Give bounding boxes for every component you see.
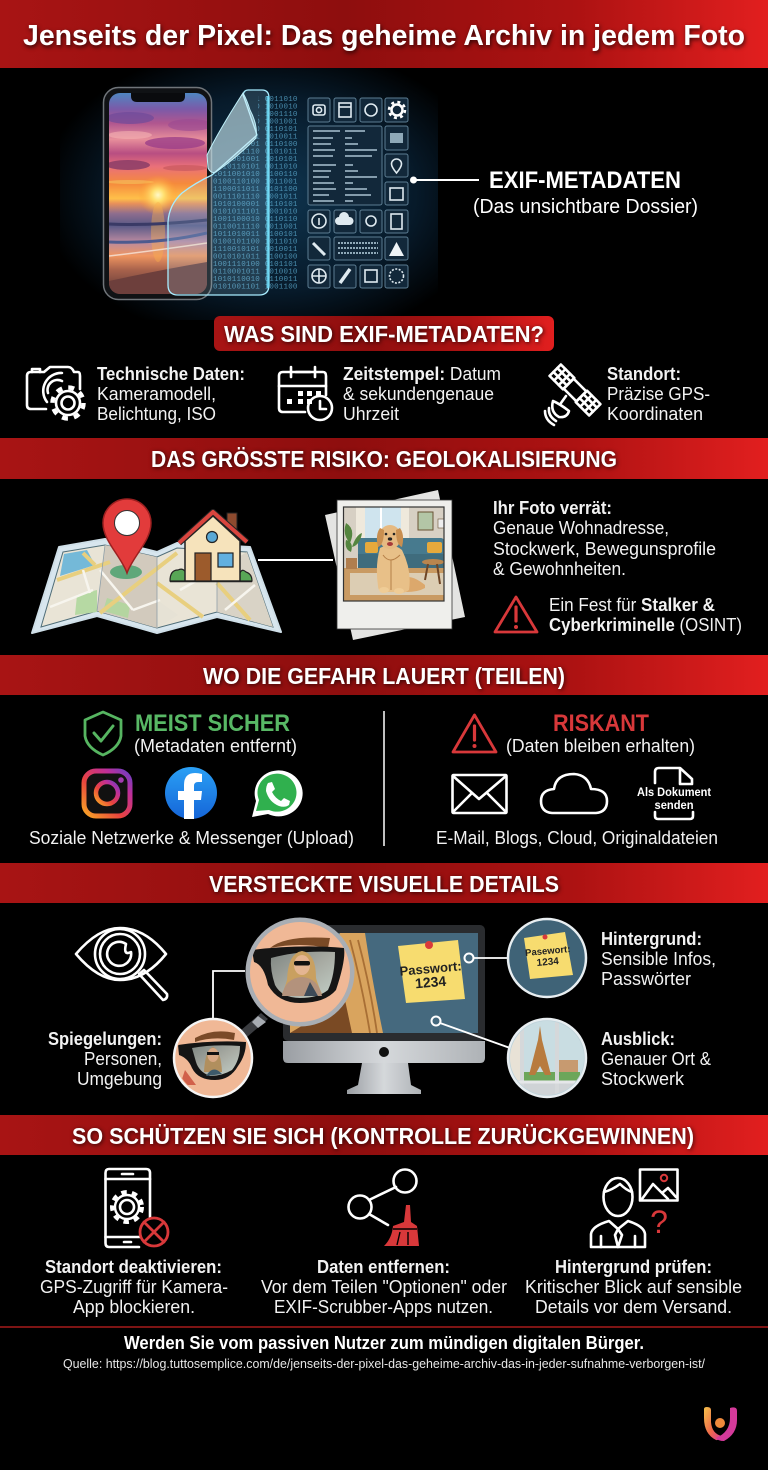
tip: Daten entfernen: Daten entfernen: <box>317 1256 450 1277</box>
text: Hintergrund: Sensible Infos, <box>601 948 716 969</box>
panel: riskant: (Daten bleiben erhalten) <box>506 735 695 756</box>
text: Ihr Foto verrät <box>493 497 716 579</box>
tip: Standort deaktivieren <box>40 1169 228 1317</box>
text: Spiegelungen: Umgebung <box>77 1068 162 1089</box>
phone <box>104 88 212 300</box>
text: Ihr Foto verrät: & Gewohnheiten. <box>493 558 626 579</box>
tip: Standort deaktivieren: GPS-Zugriff für Kamera- <box>40 1276 228 1297</box>
icon: WhatsApp <box>252 770 303 817</box>
panel: meist sicher: MEIST SICHER <box>135 710 290 737</box>
section bar: Wo die Gefahr lauert: WO DIE GEFAHR LAUERT (TEILEN) <box>203 663 565 689</box>
icon: cloud <box>541 774 607 813</box>
panel: riskant: E-Mail, Blogs, Cloud, Originaldateien <box>436 827 718 848</box>
callout: Stalker warning: Cyberkriminelle (OSINT) <box>549 614 742 635</box>
text: Spiegelungen <box>48 1028 162 1089</box>
panel: meist sicher: (Metadaten entfernt) <box>134 735 297 756</box>
circle: Hintergrund detail <box>508 919 586 997</box>
binary data columns: 0110001011 1010010 <box>213 268 298 276</box>
text: Hintergrund: Hintergrund: <box>601 928 702 949</box>
binary data columns: 0101100101 1010011 <box>213 134 298 142</box>
sticky note <box>398 940 465 1003</box>
header banner <box>0 0 768 68</box>
circle: Hintergrund detail: 1234 <box>536 956 560 969</box>
binary data columns: 1001101011 0011010 <box>213 96 298 104</box>
text: Ihr Foto verrät: Ihr Foto verrät: <box>493 497 612 518</box>
icon: person with image and question mark <box>591 1170 678 1247</box>
section bar: Versteckte visuelle Details <box>0 863 768 903</box>
icon: share with broom <box>348 1170 419 1246</box>
binary data columns: 0110011110 0011001 <box>213 224 298 232</box>
callout: EXIF-Metadaten: EXIF-METADATEN <box>489 167 681 194</box>
footer divider <box>0 1326 768 1328</box>
tip: Hintergrund prüfen: Kritischer Blick auf sensible <box>525 1276 742 1297</box>
binary data columns: 1100101001 1001110 <box>213 111 298 119</box>
binary data columns: 1011001010 1100110 <box>213 171 298 179</box>
tip: Daten entfernen: EXIF-Scrubber-Apps nutzen. <box>274 1296 493 1317</box>
circle: Ausblick detail <box>508 1019 586 1097</box>
panel: meist sicher: Soziale Netzwerke & Messenger (Upload) <box>29 827 354 848</box>
closing statement: Werden Sie vom passiven Nutzer zum mündigen digitalen Bürger. <box>124 1332 644 1353</box>
house <box>170 512 252 582</box>
binary data columns: 1001100010 0110110 <box>213 216 298 224</box>
icon: phone with gear and red cross <box>106 1169 168 1247</box>
tip: Daten entfernen <box>261 1170 507 1317</box>
item: Standort: Standort: <box>607 363 681 384</box>
illustration: monitor with photo and note <box>283 925 485 1094</box>
binary data columns: 0101011101 1001010 <box>213 208 298 216</box>
section bar: Geolokalisierung: DAS GRÖSSTE RISIKO: GEOLOKALISIERUNG <box>151 446 617 472</box>
binary data columns: 0011101110 1001011 <box>213 194 298 202</box>
hero illustration: phone with peeled film and metadata panel <box>60 68 438 320</box>
text: Ausblick <box>601 1028 712 1089</box>
panel: riskant: RISKANT <box>553 710 649 737</box>
tip: Daten entfernen: Vor dem Teilen "Optionen" oder <box>261 1276 507 1297</box>
callout: EXIF-Metadaten: (Das unsichtbare Dossier) <box>473 196 698 218</box>
section bar: Geolokalisierung <box>0 438 768 479</box>
text: Ausblick: Ausblick: <box>601 1028 675 1049</box>
illustration: polaroid stack with dog photo <box>325 490 465 640</box>
binary data columns: 1010110010 0110011 <box>213 276 298 284</box>
panel: meist sicher <box>29 710 354 848</box>
binary data columns: 1001011001 0110100 <box>213 141 298 149</box>
text: Hintergrund: Passwörter <box>601 968 691 989</box>
callout: Stalker warning: Ein Fest für Stalker & <box>549 594 715 615</box>
text: Ihr Foto verrät: Stockwerk, Bewegunsprofile <box>493 538 716 559</box>
icon: camera with gear <box>27 367 84 418</box>
tip: Hintergrund prüfen: Details vor dem Versand. <box>535 1296 732 1317</box>
item: technische Daten <box>27 363 245 424</box>
section bar: So schützen Sie sich: SO SCHÜTZEN SIE SICH (KONTROLLE ZURÜCKGEWINNEN) <box>72 1123 694 1149</box>
text: Ausblick: Genauer Ort & <box>601 1048 712 1069</box>
binary data columns: 0100101100 1011010 <box>213 238 298 246</box>
text: Hintergrund <box>601 928 716 989</box>
panel: riskant <box>436 710 718 848</box>
icon: eye with magnifier <box>76 928 167 1000</box>
callout markers <box>464 954 474 962</box>
binary data columns: 0010101011 1100100 <box>213 254 298 262</box>
item: Zeitstempel <box>279 363 501 424</box>
binary data columns: 1100011011 0101100 <box>213 186 298 194</box>
callout: Stalker warning <box>495 594 742 635</box>
binary data columns: 1101001001 1010101 <box>213 156 298 164</box>
monitor <box>283 925 485 1094</box>
tip: Hintergrund prüfen: Hintergrund prüfen: <box>555 1256 712 1277</box>
item: Zeitstempel: & sekundengenaue <box>343 383 494 404</box>
metadata icon grid <box>308 98 408 288</box>
circle: Hintergrund detail: Pasewort: <box>525 944 571 959</box>
icon: satellite <box>545 365 600 425</box>
item: Standort <box>545 363 710 425</box>
dog photo <box>344 507 444 601</box>
text: Ihr Foto verrät: Genaue Wohnadresse, <box>493 517 669 538</box>
binary data columns: 1011010011 0100101 <box>213 231 298 239</box>
icon: envelope <box>452 775 506 813</box>
illustration: folded map with pin and house <box>32 499 281 633</box>
binary data columns: 1110010101 0010011 <box>213 246 298 254</box>
icon: shield with check <box>85 712 121 755</box>
binary data columns: 0010110101 0011010 <box>213 164 298 172</box>
text: Ausblick: Stockwerk <box>601 1068 685 1089</box>
magnifier over sunglasses <box>240 920 353 1037</box>
binary data columns: 0110101110 0101011 <box>213 148 298 156</box>
icon: person with image and question mark: ? <box>650 1204 668 1240</box>
map <box>32 539 281 633</box>
item: Standort: Präzise GPS- <box>607 383 710 404</box>
divider <box>383 711 385 846</box>
icon: Facebook <box>165 767 217 819</box>
binary data columns: 0101001101 1001100 <box>213 284 298 292</box>
icon: warning triangle <box>453 715 496 752</box>
sticky note: 1234 <box>414 973 447 991</box>
callout: EXIF-Metadaten <box>410 167 698 218</box>
tip: Hintergrund prüfen <box>525 1170 742 1317</box>
icon: warning triangle <box>495 597 537 632</box>
binary data columns: 1010100001 0110101 <box>213 201 298 209</box>
binary data columns: 1010011010 0110101 <box>213 126 298 134</box>
binary data columns: 0110100100 1010010 <box>213 104 298 112</box>
connector lines <box>213 958 510 1048</box>
item: Zeitstempel: Uhrzeit <box>343 403 399 424</box>
sticky note: Passwort: <box>399 958 462 979</box>
circle: Spiegelungen detail <box>174 1019 252 1097</box>
section pill: Was sind EXIF-Metadaten: WAS SIND EXIF-METADATEN? <box>224 321 544 347</box>
tip: Standort deaktivieren: App blockieren. <box>73 1296 195 1317</box>
connector line <box>258 559 333 561</box>
item: Zeitstempel: Zeitstempel: Datum <box>343 363 501 384</box>
text: Spiegelungen: Spiegelungen: <box>48 1028 162 1049</box>
section bar: Wo die Gefahr lauert <box>0 655 768 695</box>
icon: calendar with clock <box>279 367 332 420</box>
icon: document with label <box>637 768 711 819</box>
binary data columns: 0011010110 1001001 <box>213 118 298 126</box>
section bar: So schützen Sie sich <box>0 1115 768 1155</box>
item: technische Daten: Technische Daten: <box>97 363 245 384</box>
item: Standort: Koordinaten <box>607 403 703 424</box>
icon: Instagram <box>84 771 130 816</box>
peeled transparent film <box>168 90 269 295</box>
item: technische Daten: Kameramodell, <box>97 383 216 404</box>
icon: document with label: Als Dokument <box>637 785 711 799</box>
section bar: Versteckte visuelle Details: VERSTECKTE VISUELLE DETAILS <box>209 871 559 897</box>
text: Spiegelungen: Personen, <box>84 1048 162 1069</box>
binary data columns: 1001110100 0101101 <box>213 261 298 269</box>
tip: Standort deaktivieren: Standort deaktivieren: <box>45 1256 222 1277</box>
binary data columns: 0100110100 1011001 <box>213 178 298 186</box>
icon: document with label: senden <box>654 798 694 812</box>
source line: Quelle: https://blog.tuttosemplice.com/de/jenseits-der-pixel-das-geheime-archiv-das-in-jeder-sufnahme-verborgen-ist/ <box>63 1357 706 1371</box>
map pin <box>103 499 151 579</box>
title: Jenseits der Pixel: Das geheime Archiv in jedem Foto <box>23 20 745 52</box>
item: technische Daten: Belichtung, ISO <box>97 403 216 424</box>
logo <box>704 1407 737 1441</box>
binary data columns <box>213 96 298 292</box>
